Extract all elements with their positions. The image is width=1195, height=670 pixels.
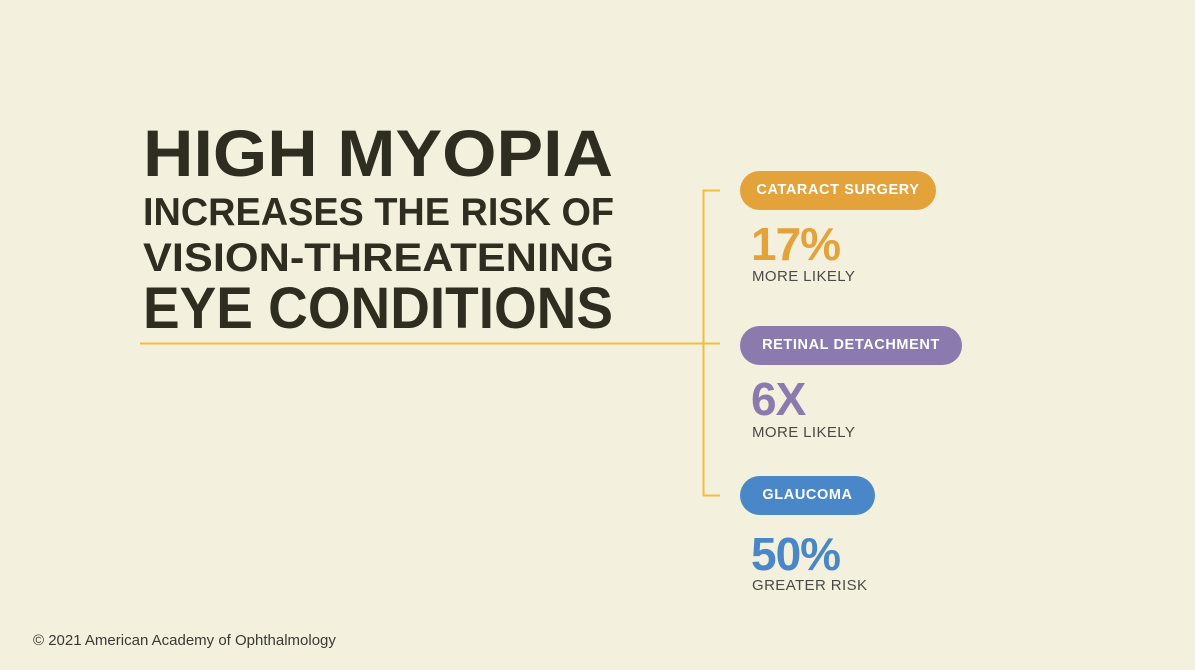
pill: glaucoma: GLAUCOMA: [762, 487, 853, 503]
stat: 6X: 6X: [751, 373, 805, 425]
label: greater risk: GREATER RISK: [752, 577, 867, 594]
label: more likely: MORE LIKELY: [752, 424, 855, 441]
pill: glaucoma: [740, 476, 875, 515]
title: VISION-THREATENING: [143, 236, 614, 280]
pill: retinal detachment: [740, 326, 962, 365]
pill: cataract surgery: CATARACT SURGERY: [756, 182, 920, 198]
title: EYE CONDITIONS: [143, 276, 613, 341]
pill: cataract surgery: [740, 171, 936, 210]
stat: 50%: 50%: [751, 528, 840, 580]
title: INCREASES THE RISK OF: [143, 191, 614, 234]
copyright: © 2021 American Academy of Ophthalmology: [33, 632, 336, 649]
pill: retinal detachment: RETINAL DETACHMENT: [762, 337, 940, 353]
label: more likely: MORE LIKELY: [752, 268, 855, 285]
title: [143, 116, 614, 341]
stat: 17%: 17%: [751, 218, 840, 270]
title: HIGH MYOPIA: [143, 116, 613, 190]
connector bracket: [140, 190, 720, 496]
